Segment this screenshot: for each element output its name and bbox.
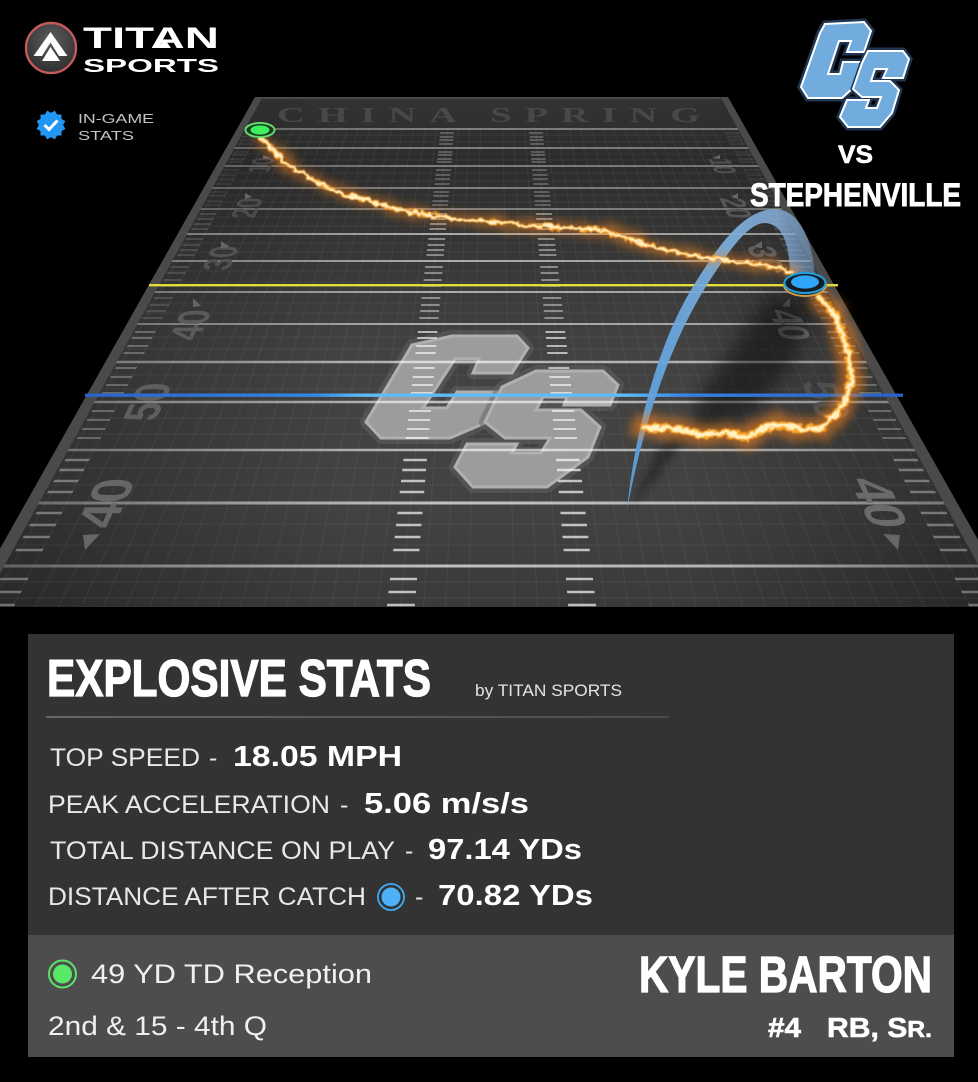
panel background: [28, 634, 954, 935]
left yard numbers: 50: [113, 383, 184, 421]
stat: distance after catch: [48, 880, 593, 912]
right yard numbers: [708, 159, 906, 526]
play description: 49 YD TD Reception: [91, 959, 372, 989]
team logo: CS: [801, 22, 909, 127]
logo letter S outline: [455, 371, 618, 487]
logo subtitle: SPORTS: [83, 56, 219, 76]
left yard numbers: 40: [159, 310, 221, 340]
matchup text: [750, 141, 961, 213]
first down line: [85, 394, 903, 397]
stat: peak acceleration: 5.06 m/s/s: [364, 788, 529, 820]
right yard numbers: 20: [711, 198, 759, 218]
heading: EXPLOSIVE STATS: [47, 650, 431, 708]
badge text: [78, 111, 154, 143]
player route: start to catch: [260, 137, 793, 273]
matchup text: VS: [838, 141, 873, 169]
right yard numbers: 40: [836, 478, 920, 528]
stat: total distance: [50, 834, 582, 866]
stat: peak acceleration: PEAK ACCELERATION: [48, 791, 330, 819]
icon: verified check: [37, 111, 65, 139]
left yard numbers: 10: [242, 157, 283, 173]
stat: top speed: 18.05 MPH: [233, 741, 402, 773]
icon: catch marker: [378, 884, 404, 910]
panel: play summary: [28, 935, 954, 1057]
center field CS logo: [366, 336, 618, 487]
player details: #4: [768, 1012, 801, 1043]
sideline hash marks: [0, 133, 978, 605]
stat: total distance: -: [405, 837, 413, 865]
right yard numbers: 30: [738, 246, 792, 270]
left yard numbers: 40: [65, 478, 149, 528]
right yard numbers: 40: [759, 310, 822, 340]
left yard numbers: [82, 158, 274, 528]
logo badge: [26, 23, 76, 73]
stat: distance after catch: DISTANCE AFTER CATCH: [48, 883, 366, 911]
inner hash marks: [386, 132, 596, 606]
right yard numbers: 10: [701, 158, 742, 174]
badge text: STATS: [78, 128, 134, 143]
badge text: IN-GAME: [78, 111, 154, 126]
marker: start of play: [246, 123, 274, 137]
player route: after the catch: [643, 297, 852, 438]
logo letter S: [455, 371, 618, 487]
panel: explosive stats: [28, 634, 954, 935]
byline: by TITAN SPORTS: [475, 681, 622, 700]
field surface: [0, 97, 978, 607]
stat: total distance: 97.14 YDs: [428, 834, 582, 866]
stat: peak acceleration: -: [340, 791, 348, 819]
Titan Sports logo: [26, 22, 219, 76]
player details: RB, SR.: [827, 1012, 932, 1043]
down and quarter: 2nd & 15 - 4th Q: [48, 1011, 267, 1041]
ball flight shadow: [630, 295, 815, 508]
in-game stats badge: [37, 111, 154, 143]
stat: top speed: [50, 741, 402, 773]
stat: distance after catch: 70.82 YDs: [438, 880, 593, 912]
marker: catch point: [784, 273, 826, 296]
stat: total distance: TOTAL DISTANCE ON PLAY: [50, 837, 395, 865]
ball flight arc: [627, 209, 815, 510]
stat: top speed: -: [209, 744, 217, 772]
end zone text: CHINA SPRING: [277, 103, 713, 127]
right yard numbers: 50: [790, 381, 861, 419]
player details: [768, 1012, 932, 1043]
logo letter C: [366, 336, 528, 438]
left yard numbers: 30: [194, 246, 248, 270]
stat: distance after catch: -: [415, 883, 423, 911]
logo wordmark: TITAN: [83, 22, 219, 55]
yard lines: [0, 129, 978, 566]
stat: top speed: TOP SPEED: [50, 744, 200, 772]
field turf: [0, 97, 978, 607]
left yard numbers: 20: [224, 198, 272, 218]
football field: [0, 97, 978, 607]
logo letter C outline: [366, 336, 528, 438]
icon: start marker: [49, 960, 76, 988]
summary background: [28, 935, 954, 1057]
stat: peak acceleration: [48, 788, 529, 820]
line of scrimmage: [149, 284, 838, 286]
direction arrows: [83, 155, 900, 550]
logo wordmark accent: [158, 39, 171, 48]
